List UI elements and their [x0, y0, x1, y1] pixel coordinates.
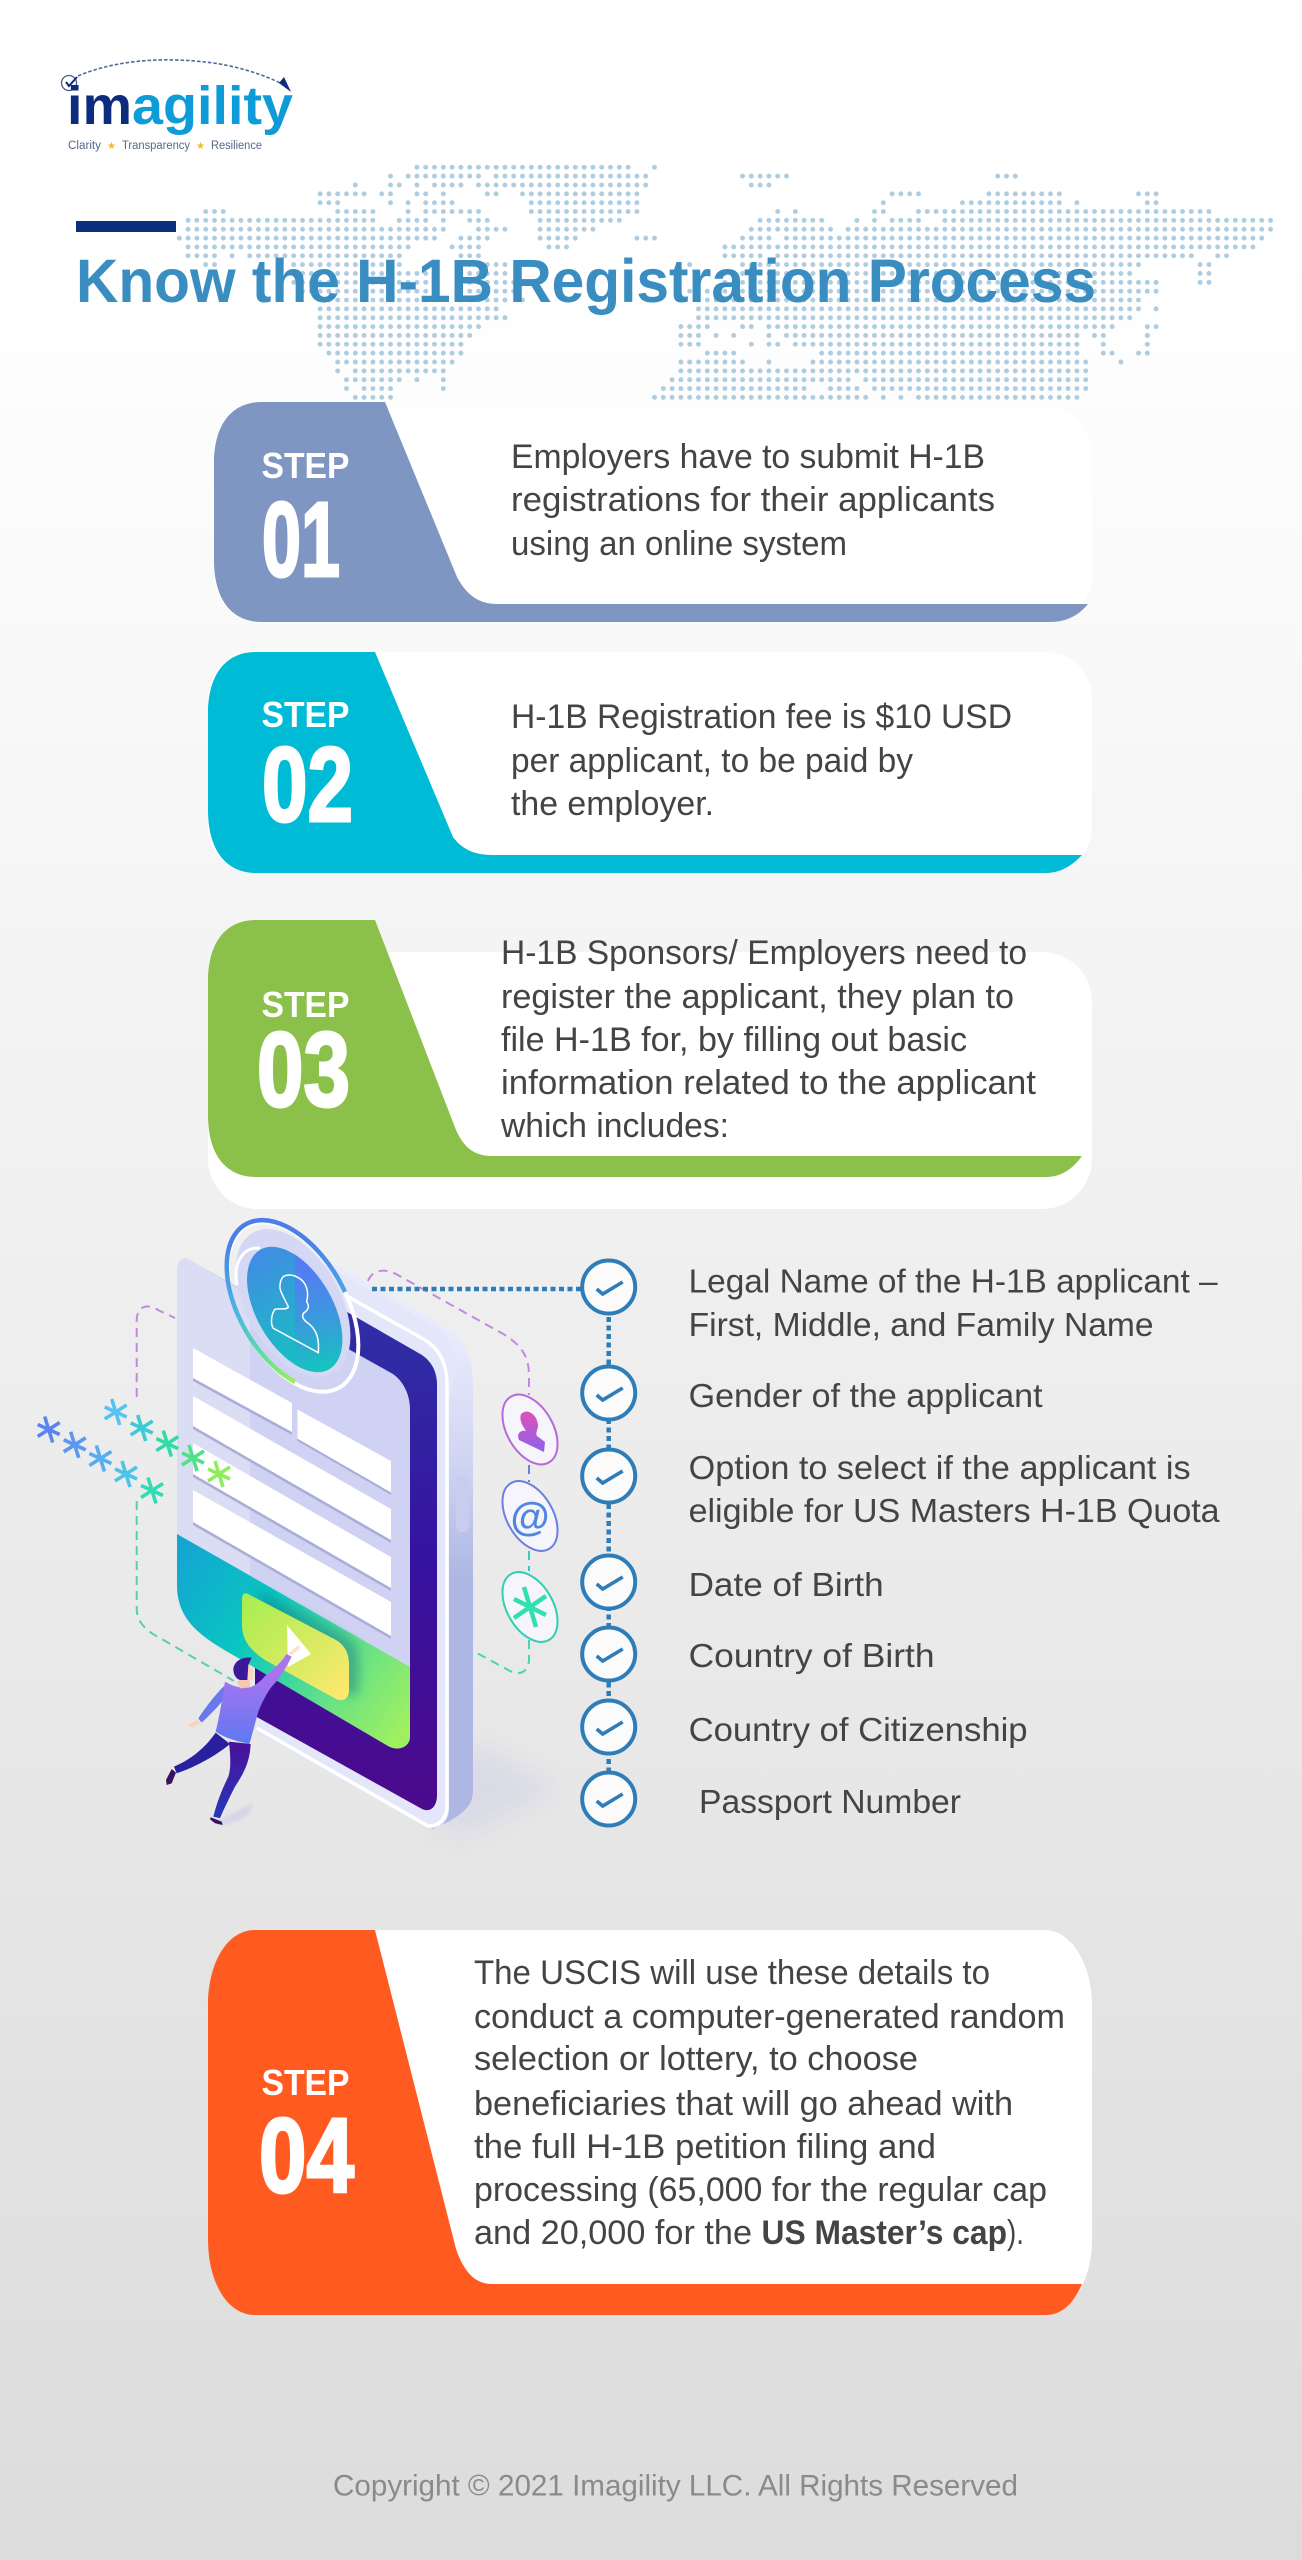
phone highlight — [257, 1295, 447, 1826]
step text — [511, 438, 995, 563]
panel: step 01 — [214, 402, 1092, 622]
check icon 6 — [582, 1700, 635, 1754]
panel: step 04 — [208, 1930, 1092, 2315]
step text: the employer. — [511, 785, 714, 823]
logo paper plane — [279, 77, 291, 92]
step text: which includes: — [500, 1107, 729, 1145]
step text: per applicant, to be paid by — [511, 742, 913, 780]
step text: register the applicant, they plan to — [501, 978, 1014, 1016]
step text: H-1B Sponsors/ Employers need to — [501, 934, 1027, 972]
logo check badge — [62, 76, 77, 90]
checklist connectors — [372, 1289, 609, 1799]
avatar badge — [224, 1218, 360, 1394]
person pointing at button — [166, 1645, 300, 1825]
dashed connector frame — [137, 1271, 529, 1681]
phone screen — [255, 1285, 437, 1810]
checklist text: Country of Citizenship — [689, 1711, 1028, 1748]
asterisks row 1 — [105, 1399, 230, 1487]
coloured tab — [208, 1930, 1082, 2315]
dotted world map — [179, 167, 1271, 397]
step label: STEP — [262, 694, 350, 735]
step text: selection or lottery, to choose — [474, 2040, 918, 2078]
step label: STEP — [262, 984, 350, 1025]
coloured tab — [214, 402, 1088, 622]
checklist text — [689, 1262, 1220, 1820]
checklist text: Country of Birth — [689, 1637, 935, 1674]
submit button — [242, 1593, 349, 1700]
step text: H-1B Registration fee is $10 USD — [511, 698, 1012, 736]
step text — [474, 1954, 1065, 2252]
step number: 04 — [259, 2097, 354, 2215]
check icon 4 — [582, 1556, 635, 1608]
step text: information related to the applicant — [501, 1064, 1037, 1102]
check icon 7 — [582, 1772, 635, 1826]
icon: at-sign bubble — [491, 1472, 569, 1560]
logo tagline: Clarity — [68, 140, 101, 152]
white card — [214, 407, 1092, 622]
checklist text: Date of Birth — [689, 1566, 884, 1603]
submit button shadow — [258, 1590, 359, 1696]
checklist text: eligible for US Masters H-1B Quota — [689, 1492, 1220, 1529]
logo tagline: ★ — [196, 141, 205, 152]
white card — [208, 952, 1092, 1209]
step text: processing (65,000 for the regular cap — [474, 2171, 1047, 2209]
phone side button — [456, 1476, 469, 1532]
step text: ). — [1007, 2214, 1024, 2252]
logo tagline: Transparency — [122, 140, 190, 152]
copyright: Copyright © 2021 Imagility LLC. All Rights Reserved — [333, 2470, 1018, 2502]
logo dashed arc — [78, 60, 282, 84]
white card — [208, 1930, 1092, 2315]
panel: step 03 — [208, 920, 1092, 1209]
icon: at-sign bubble: @ — [510, 1495, 550, 1539]
play triangle — [287, 1625, 311, 1667]
logo tagline: ★ — [107, 141, 116, 152]
step text: using an online system — [511, 525, 847, 563]
white card — [208, 652, 1092, 873]
check icon 1 — [582, 1260, 635, 1314]
step text — [511, 698, 1012, 823]
checklist text: Option to select if the applicant is — [689, 1449, 1191, 1486]
step label: STEP — [262, 445, 350, 486]
logo tagline: Resilience — [211, 140, 262, 152]
logo wordmark: imagility — [67, 76, 293, 136]
step text: the full H-1B petition filing and — [474, 2128, 936, 2166]
checklist text: Gender of the applicant — [689, 1377, 1043, 1414]
form panel — [177, 1258, 410, 1670]
step number: 02 — [262, 726, 353, 844]
check icon 3 — [582, 1450, 635, 1502]
logo tagline — [68, 140, 262, 152]
coloured tab — [208, 920, 1082, 1177]
check icon 5 — [582, 1628, 635, 1680]
asterisks row 2 — [38, 1416, 163, 1504]
checklist text: First, Middle, and Family Name — [689, 1306, 1154, 1343]
step text: beneficiaries that will go ahead with — [474, 2085, 1013, 2123]
floor shadow — [430, 1740, 560, 1835]
step text: The USCIS will use these details to — [474, 1954, 990, 1992]
gradient footer of form — [177, 1534, 410, 1749]
step number: 01 — [262, 481, 340, 599]
phone side — [257, 1265, 473, 1829]
icon: user bubble — [491, 1385, 569, 1474]
step text: file H-1B for, by filling out basic — [501, 1021, 967, 1059]
translucent form strip — [177, 1258, 250, 1575]
title: Know the H-1B Registration Process — [76, 247, 1096, 315]
check icon 2 — [582, 1366, 635, 1420]
phone front bezel — [257, 1262, 456, 1828]
step text — [500, 934, 1037, 1145]
checklist — [582, 1260, 1220, 1826]
checklist text: Legal Name of the H-1B applicant – — [689, 1262, 1218, 1300]
step text: Employers have to submit H-1B — [511, 438, 985, 476]
illustration: phone with registration form — [38, 1200, 569, 1835]
icon: asterisk bubble — [491, 1563, 569, 1651]
step text: registrations for their applicants — [511, 481, 995, 519]
logo: imagility — [62, 60, 293, 152]
step text: conduct a computer-generated random — [474, 1998, 1065, 2036]
step label: STEP — [262, 2062, 350, 2103]
checklist text: Passport Number — [699, 1783, 961, 1820]
panel: step 02 — [208, 652, 1092, 873]
coloured tab — [208, 652, 1082, 873]
form fields — [193, 1348, 391, 1639]
step text: US Master’s cap — [762, 2214, 1007, 2252]
step text: and 20,000 for the — [474, 2214, 752, 2252]
title accent bar — [76, 221, 176, 232]
step number: 03 — [257, 1011, 350, 1129]
